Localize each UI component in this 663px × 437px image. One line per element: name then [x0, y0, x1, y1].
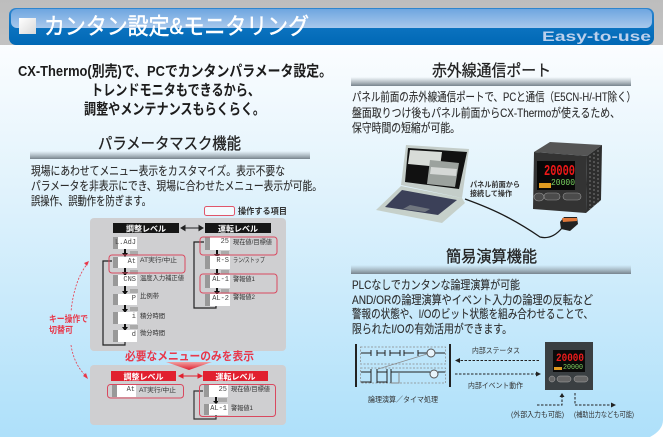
highlight boxes: [109, 237, 277, 293]
label: connect from panel front: パネル前面から: [470, 179, 520, 189]
menu column: operation: R-S: [216, 257, 229, 265]
illustration: temperature controller: 20000: [551, 178, 575, 188]
menu column: adjustment: AT実行/中止: [140, 255, 178, 264]
heading: infrared port: 赤外線通信ポート: [432, 62, 551, 80]
lead statement: CX-Thermo(別売)で、PCでカンタンパラメータ設定。: [18, 63, 332, 80]
menu column: adjustment: L.AdJ: [115, 239, 136, 247]
menu column: adjustment: 積分時間: [140, 311, 165, 320]
legend: operated item: [204, 206, 287, 216]
text: simple logic description: AND/ORの論理演算やイベント入力の論理の反転など: [352, 292, 593, 307]
menu items: operation: 警報値1: [231, 403, 253, 412]
arrow: auxiliary output: (補助出力なども可能): [574, 409, 634, 419]
menu column: operation: 25: [221, 238, 229, 246]
menu column: operation: 警報値1: [233, 274, 255, 283]
arrow: operation loop: [194, 242, 216, 308]
label: adjustment level: [111, 371, 176, 382]
label: operation level: 運転レベル: [218, 224, 258, 234]
menu column: operation: [205, 237, 272, 306]
text: infrared description: [352, 89, 636, 135]
label: connect from panel front: [470, 179, 520, 198]
text: simple logic description: [352, 277, 593, 336]
heading: parameter mask: [30, 135, 310, 159]
label: operation level: [205, 223, 271, 234]
arrow: auxiliary output: [574, 393, 634, 419]
callout: key switch: 切替可: [49, 324, 73, 335]
label: logic timer: 論理演算／タイマ処理: [368, 394, 438, 404]
menu column: operation: AL-1: [212, 276, 229, 284]
arrow: external input: (外部入力も可能): [511, 409, 564, 419]
menu column: adjustment: 比例帯: [140, 291, 159, 300]
arrow: internal status: [455, 345, 539, 363]
callout: key switch: [49, 261, 89, 379]
menu column: adjustment: At: [128, 258, 136, 266]
arrow: between levels: [181, 226, 203, 230]
cable: [465, 199, 562, 238]
menu column: operation: 現在値/目標値: [233, 237, 272, 246]
menu column: adjustment: 微分時間: [140, 328, 165, 337]
legend: operated item: 操作する項目: [238, 206, 287, 216]
heading: parameter mask: パラメータマスク機能: [98, 135, 241, 153]
panel: full menu: [90, 218, 286, 351]
illustration: temperature controller: 20000: [544, 163, 575, 180]
lead statement: [18, 63, 332, 118]
text: infrared description: 保守時間の短縮が可能。: [352, 120, 460, 135]
menu item: AT: AT実行/中止: [139, 385, 177, 394]
menu items: operation: AL-1: [210, 405, 227, 413]
menu item: AT: [108, 384, 184, 398]
menu items: operation: [194, 384, 276, 419]
menu column: adjustment: CNS: [123, 276, 136, 284]
menu column: operation: 警報値2: [233, 292, 255, 301]
label: operation level: 運転レベル: [216, 372, 256, 382]
label: operation level: [203, 371, 268, 382]
text: parameter mask description: 現場にあわせてメニュー表示をカスタマイズ。表示不要な: [31, 163, 285, 178]
text: parameter mask description: パラメータを非表示にでき、現場に合わせたメニュー表示が可能。: [31, 178, 322, 193]
arrow: internal event: [455, 372, 541, 390]
arrow: internal status: 内部ステータス: [472, 345, 520, 355]
callout: key switch: キー操作で: [49, 313, 88, 324]
arrow: external input: [511, 393, 564, 419]
header tag: Easy-to-use: [542, 29, 652, 44]
menu column: adjustment: i: [132, 313, 136, 321]
icon: white square: [19, 18, 36, 34]
menu column: adjustment: [113, 237, 184, 342]
illustration: controller front: [545, 342, 593, 390]
text: simple logic description: PLCなしでカンタンな論理演算が可能: [352, 277, 520, 292]
heading: simple logic: 簡易演算機能: [446, 247, 537, 266]
panel: reduced menu: [90, 362, 286, 425]
arrow: adjustment loop: [103, 261, 125, 345]
illustration: controller front: 20000: [556, 353, 584, 365]
illustration: temperature controller: [533, 142, 602, 231]
menu column: adjustment: 温度入力補正値: [140, 273, 184, 282]
arrow: reduction: [166, 362, 212, 370]
text: parameter mask description: [31, 163, 322, 208]
lead statement: トレンドモニタもできるから、: [91, 82, 260, 99]
lead statement: 調整やメンテナンスもらくらく。: [84, 100, 265, 118]
illustration: laptop: [376, 145, 469, 223]
menu column: adjustment: d: [132, 331, 136, 339]
header bar: [9, 8, 654, 45]
diagram: ladder logic: [356, 344, 450, 387]
text: simple logic description: 限られたI/Oの有効活用ができます。: [352, 321, 512, 336]
menu items: operation: 25: [219, 386, 227, 394]
label: connect from panel front: 接続して操作: [470, 188, 512, 198]
header title: カンタン設定&モニタリング: [44, 13, 309, 39]
heading: only needed menus: 必要なメニューのみを表示: [125, 349, 254, 363]
arrow: between levels: [179, 374, 202, 378]
menu column: adjustment: P: [132, 295, 136, 303]
menu item: AT: At: [127, 386, 135, 394]
text: simple logic description: 警報の状態や、I/Oのビット状態を組み合わせることで、: [352, 306, 593, 321]
arrow: internal event: 内部イベント動作: [468, 380, 523, 390]
label: adjustment level: 調整レベル: [126, 224, 166, 234]
illustration: controller front: 20000: [563, 364, 583, 372]
label: adjustment level: 調整レベル: [124, 372, 164, 382]
label: adjustment level: [113, 223, 179, 234]
menu column: operation: AL-2: [212, 295, 229, 303]
heading: simple logic: [351, 247, 631, 274]
text: parameter mask description: 誤操作、誤動作を防ぎます。: [31, 193, 151, 208]
heading: infrared port: [351, 62, 631, 86]
menu items: operation: 現在値/目標値: [231, 384, 270, 393]
menu column: operation: ラン/ストップ: [233, 256, 265, 264]
